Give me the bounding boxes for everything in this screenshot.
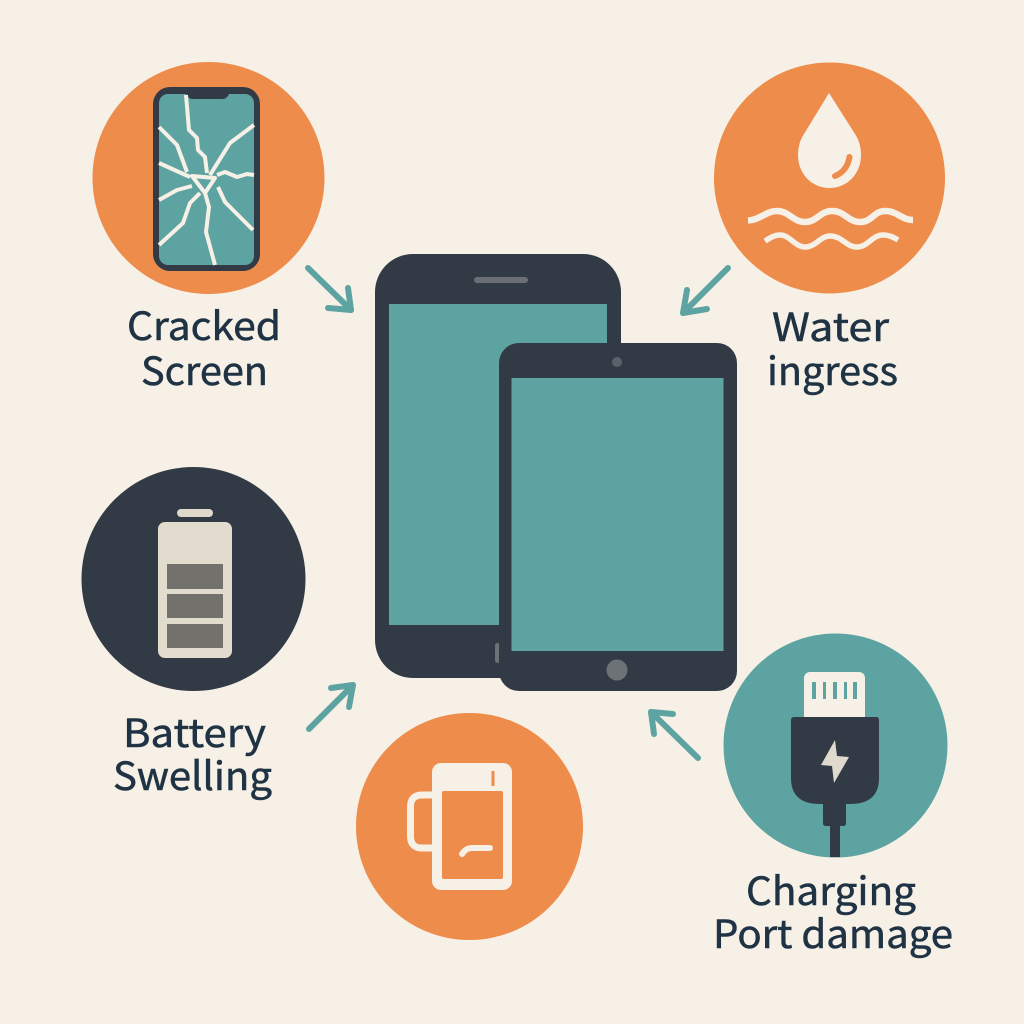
icon: charging port — [724, 634, 948, 858]
label: battery swelling: Swelling — [113, 746, 272, 802]
label: battery swelling — [113, 703, 272, 802]
label: charging port damage: Port damage — [713, 904, 953, 960]
label: water ingress — [767, 297, 898, 397]
label: cracked screen — [127, 296, 281, 397]
label: water ingress: ingress — [767, 341, 898, 397]
icon: water ingress — [714, 62, 945, 294]
phone — [375, 254, 621, 678]
label: battery swelling: Battery — [123, 703, 266, 759]
arrow: charging port to tablet — [651, 712, 698, 758]
label: cracked screen: Screen — [141, 341, 268, 397]
arrow: water ingress to device — [683, 268, 728, 313]
label: charging port damage — [713, 861, 953, 960]
label: charging port damage: Charging — [746, 861, 916, 917]
arrow: cracked screen to phone — [308, 268, 351, 310]
arrow: battery to phone — [309, 685, 353, 729]
icon: mug-shaped power bank — [356, 713, 583, 940]
icon: cracked screen — [92, 62, 324, 294]
label: water ingress: Water — [772, 297, 890, 353]
icon: battery swelling — [82, 467, 306, 691]
icon: phone and tablet devices — [375, 254, 737, 691]
label: cracked screen: Cracked — [127, 296, 281, 352]
tablet — [499, 343, 737, 691]
